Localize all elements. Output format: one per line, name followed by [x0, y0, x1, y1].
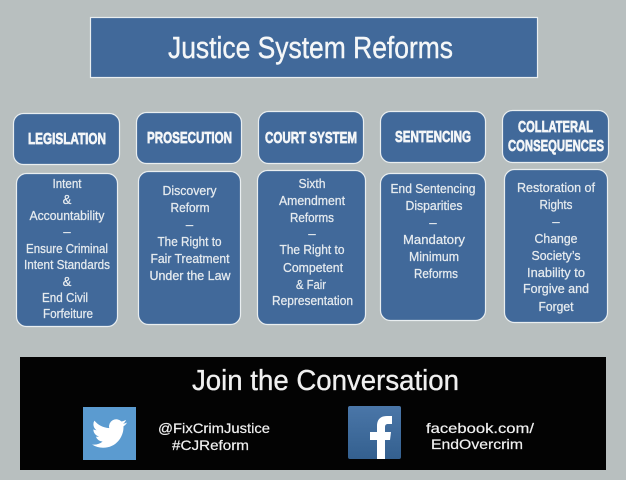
- text panel: sentencing: [380, 174, 486, 320]
- twitter handle and hashtag: [158, 420, 270, 453]
- text panel: court system: Reforms: [290, 210, 334, 225]
- text panel: prosecution: Fair Treatment: [150, 251, 230, 266]
- icon: facebook: [348, 406, 401, 459]
- column: sentencing: [380, 112, 486, 320]
- text panel: legislation: &: [63, 192, 72, 207]
- heading: sentencing: SENTENCING: [395, 129, 471, 146]
- heading: sentencing: [380, 112, 486, 162]
- heading: join the conversation: Join the Conversation: [192, 365, 459, 397]
- facebook address: EndOvercrim: [431, 436, 523, 452]
- text panel: collateral consequences: Change: [534, 231, 578, 246]
- text panel: collateral consequences: –: [552, 214, 560, 229]
- text panel: collateral consequences: Restoration of: [517, 180, 595, 195]
- text panel: collateral consequences: Inability to: [527, 265, 585, 280]
- heading: collateral consequences: COLLATERAL: [518, 119, 593, 136]
- title banner: Justice System Reforms: [168, 30, 453, 65]
- text panel: collateral consequences: Forgive and: [523, 281, 589, 296]
- text panel: court system: Sixth: [298, 176, 326, 191]
- text panel: legislation: Intent: [52, 176, 82, 191]
- heading: prosecution: PROSECUTION: [147, 130, 232, 147]
- text panel: collateral consequences: Society’s: [532, 248, 581, 263]
- facebook address: [426, 420, 534, 452]
- text panel: sentencing: Reforms: [414, 266, 458, 281]
- text panel: legislation: Forfeiture: [43, 306, 93, 321]
- text panel: legislation: Ensure Criminal: [26, 241, 108, 256]
- text panel: collateral consequences: Rights: [540, 197, 573, 212]
- twitter handle and hashtag: @FixCrimJustice: [158, 420, 270, 436]
- text panel: prosecution: –: [186, 217, 194, 232]
- column: legislation: [14, 114, 120, 326]
- text panel: court system: Competent: [283, 260, 343, 275]
- text panel: court system: Amendment: [279, 193, 345, 208]
- text panel: court system: [258, 170, 366, 324]
- text panel: legislation: [16, 174, 118, 326]
- text panel: prosecution: Reform: [170, 200, 210, 215]
- text panel: court system: The Right to: [280, 242, 344, 257]
- heading: prosecution: [136, 112, 242, 164]
- text panel: sentencing: Mandatory: [403, 232, 466, 247]
- text panel: sentencing: Disparities: [406, 198, 463, 213]
- text panel: legislation: End Civil: [42, 290, 88, 305]
- text panel: prosecution: Under the Law: [150, 268, 231, 283]
- title banner: [90, 18, 538, 78]
- heading: legislation: [14, 114, 120, 164]
- text panel: sentencing: Minimum: [409, 249, 459, 264]
- heading: court system: COURT SYSTEM: [265, 130, 357, 147]
- text panel: sentencing: –: [429, 215, 437, 230]
- text panel: court system: & Fair: [296, 277, 327, 292]
- text panel: prosecution: Discovery: [162, 183, 217, 198]
- text panel: prosecution: The Right to: [158, 234, 222, 249]
- text panel: legislation: &: [63, 274, 72, 289]
- heading: legislation: LEGISLATION: [28, 131, 106, 148]
- facebook address: facebook.com/: [426, 420, 534, 436]
- text panel: court system: Representation: [272, 293, 353, 308]
- text panel: court system: –: [308, 226, 316, 241]
- text panel: collateral consequences: Forget: [538, 299, 574, 314]
- text panel: collateral consequences: [504, 170, 608, 322]
- icon: twitter: [83, 407, 136, 460]
- panel: join the conversation: [20, 357, 606, 470]
- heading: collateral consequences: [502, 110, 608, 162]
- text panel: prosecution: [138, 172, 240, 324]
- text panel: sentencing: End Sentencing: [390, 181, 476, 196]
- text panel: legislation: Intent Standards: [24, 257, 110, 272]
- text panel: legislation: Accountability: [30, 208, 105, 223]
- column: court system: [258, 112, 366, 324]
- twitter handle and hashtag: #CJReform: [172, 437, 249, 453]
- column: collateral consequences: [502, 110, 608, 322]
- text panel: legislation: –: [63, 224, 71, 239]
- heading: court system: [258, 112, 364, 164]
- column: prosecution: [136, 112, 242, 324]
